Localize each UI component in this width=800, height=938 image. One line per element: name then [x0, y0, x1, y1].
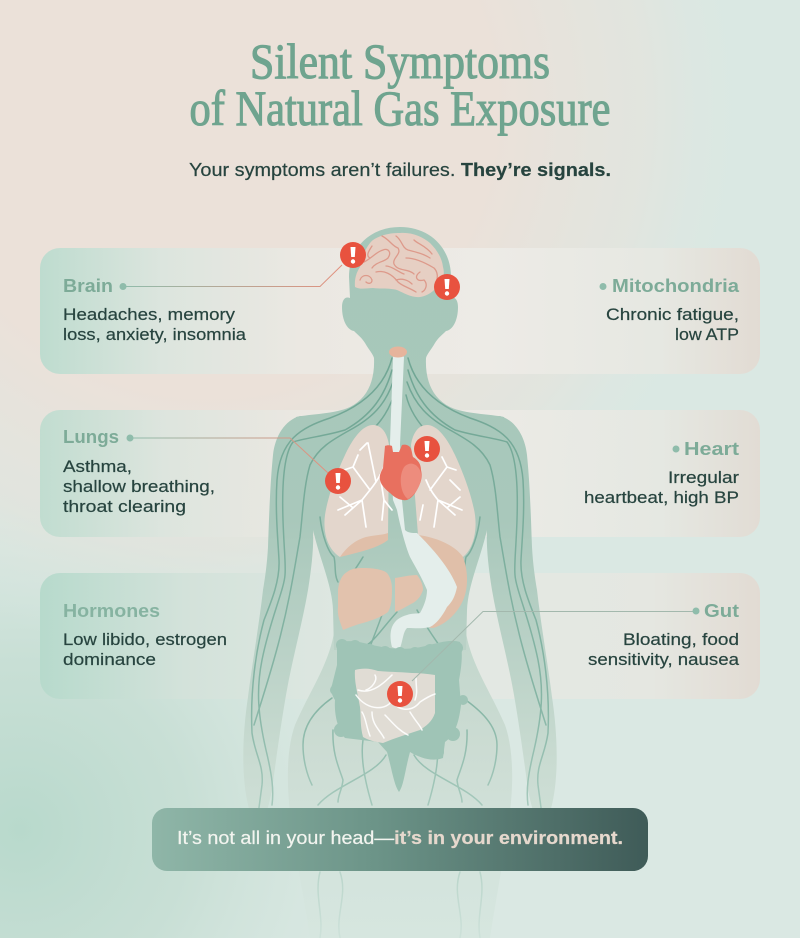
text block: heart: Heart [684, 439, 739, 459]
right bronchi [420, 457, 462, 527]
text block: brain: loss, anxiety, insomnia [63, 326, 247, 344]
heart [380, 445, 422, 500]
stomach back wall [418, 535, 467, 628]
body silhouette: left arm [243, 416, 340, 830]
text block: brain: Headaches, memory [63, 306, 236, 324]
title [190, 33, 610, 136]
body silhouette: head, neck and torso [290, 227, 510, 650]
alert icon: lungs [325, 468, 351, 494]
connector: gut [412, 612, 695, 681]
text block: hormones: dominance [63, 651, 156, 669]
text block: lungs: Asthma, [63, 458, 132, 476]
text block: gut: Gut [704, 601, 739, 621]
text block: gut: Bloating, food [623, 631, 739, 649]
text block: lungs: throat clearing [63, 498, 186, 516]
line end dots [120, 283, 700, 614]
panel: row brain and mitochondria background [40, 248, 760, 374]
text block: heart [584, 439, 740, 507]
connector: mitochondria [458, 286, 604, 288]
small intestine [355, 669, 435, 743]
esophagus and stomach [389, 346, 457, 648]
callout: It’s not all in your head— it’s in your environment. [177, 828, 623, 848]
alert icon: brain [340, 242, 366, 268]
title: of Natural Gas Exposure [190, 80, 610, 136]
colon [330, 639, 468, 792]
body silhouette: right arm [460, 416, 557, 830]
connector: lungs [130, 438, 328, 473]
text block: mitochondria: Chronic fatigue, [606, 306, 739, 324]
text block: hormones [63, 601, 227, 669]
text block: lungs [63, 427, 215, 516]
callout [152, 808, 648, 871]
liver [338, 568, 423, 630]
title: Silent Symptoms [250, 33, 550, 89]
diaphragm [340, 533, 388, 557]
alert icon: heart [414, 436, 440, 462]
text block: gut [588, 601, 740, 669]
nerves [252, 358, 548, 938]
brain [355, 233, 444, 297]
panel: row lungs and heart background [40, 410, 760, 537]
text block: lungs: Lungs [63, 427, 119, 447]
lungs [324, 425, 476, 557]
connector: brain [122, 265, 342, 286]
throat spot [389, 346, 407, 358]
text block: lungs: shallow breathing, [63, 478, 215, 496]
left bronchi [338, 443, 392, 527]
text block: brain: Brain [63, 276, 113, 296]
text block: mitochondria: low ATP [675, 326, 739, 344]
text block: hormones: Hormones [63, 601, 160, 621]
text block: gut: sensitivity, nausea [588, 651, 740, 669]
text block: heart: heartbeat, high BP [584, 489, 739, 507]
subtitle: Your symptoms aren’t failures. They’re signals. [189, 160, 611, 180]
body illustration [120, 227, 700, 938]
text block: mitochondria [606, 276, 740, 344]
alert icon: gut [387, 681, 413, 707]
text block: heart: Irregular [668, 469, 740, 487]
text block: mitochondria: Mitochondria [612, 276, 740, 296]
panel: row hormones and gut background [40, 573, 760, 699]
connector: heart [437, 448, 677, 450]
text block: hormones: Low libido, estrogen [63, 631, 227, 649]
alert icon: mitochondria [434, 274, 460, 300]
body silhouette: hips and legs [288, 625, 512, 938]
text block: brain [63, 276, 247, 344]
